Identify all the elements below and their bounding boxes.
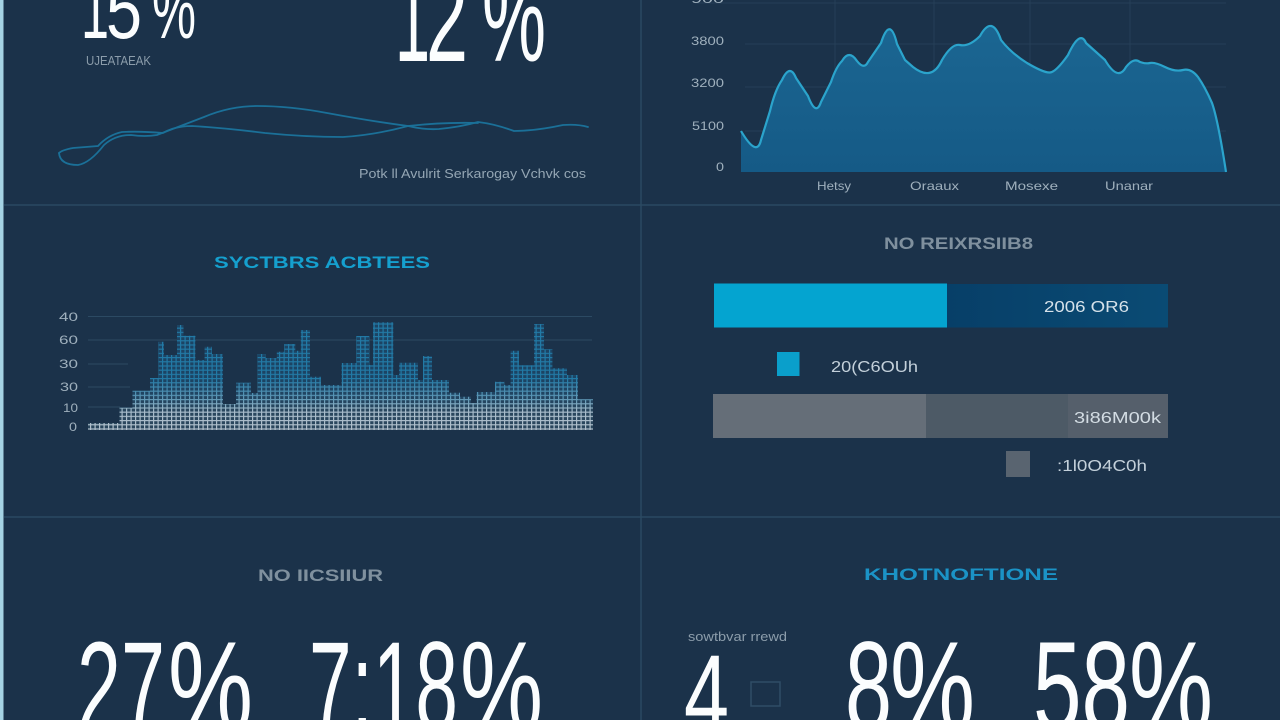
- bar: grey: 3i86M00k: [1074, 410, 1162, 427]
- panel: stacked bars: [713, 235, 1168, 477]
- area chart month labels: [817, 179, 1153, 193]
- line chart: two overlapping trends: [59, 106, 588, 165]
- area chart series: [741, 26, 1226, 172]
- area chart gridlines and axis: 0: [716, 160, 724, 174]
- dotted chart axis: [59, 310, 592, 434]
- area chart gridlines and axis: 3800: [691, 34, 724, 48]
- stat label: 15%: UJEATAEAK: [86, 54, 152, 68]
- legend: blue: [777, 352, 918, 376]
- area chart month labels: Mosexe: [1005, 179, 1058, 193]
- bar: grey: [713, 394, 1168, 438]
- stat: 8%: [845, 616, 975, 720]
- dotted chart axis: 60: [59, 333, 78, 347]
- panel: dotted bar chart: [59, 253, 594, 434]
- stat label: 4: sowtbvar rrewd: [688, 629, 787, 644]
- dotted chart axis: 10: [63, 401, 78, 415]
- dotted bars: [88, 320, 594, 432]
- area chart month labels: Unanar: [1105, 179, 1153, 193]
- panel: top left metrics: [59, 0, 588, 181]
- legend: grey: [1006, 451, 1147, 477]
- line chart caption: Potk ll Avulrit Serkarogay Vchvk cos: [359, 167, 586, 181]
- area chart gridlines and axis: [691, 0, 1226, 174]
- area chart gridlines and axis: 5100: [692, 119, 724, 133]
- dotted chart axis: 30: [60, 380, 78, 394]
- legend: grey: :1l0O4C0h: [1057, 458, 1147, 475]
- panel: bottom right metrics: [684, 566, 1213, 720]
- bar: blue: [714, 284, 1168, 328]
- dotted chart axis: 40: [59, 310, 78, 324]
- area chart month labels: Oraaux: [910, 179, 959, 193]
- panel: bottom left metrics: [77, 567, 543, 720]
- area chart month labels: Hetsy: [817, 179, 851, 193]
- area chart gridlines and axis: 3200: [691, 76, 724, 90]
- heading: bottom left: NO IICSIIUR: [258, 567, 383, 585]
- stat: 15%: [81, 0, 196, 56]
- heading: stacked bars: NO REIXRSIIB8: [884, 235, 1033, 253]
- stat: 12%: [395, 0, 546, 88]
- dotted chart axis: 0: [69, 420, 77, 434]
- legend: blue: 20(C6OUh: [831, 359, 918, 376]
- panel: area chart: [691, 0, 1226, 193]
- icon: outlined square: [751, 682, 780, 706]
- dotted chart axis: 30: [59, 357, 78, 371]
- heading: dotted bar chart: SYCTBRS ACBTEES: [214, 253, 430, 272]
- heading: bottom right: KHOTNOFTIONE: [864, 566, 1058, 584]
- area chart outline: [741, 26, 1226, 172]
- bar: blue: 2006 OR6: [1044, 299, 1129, 316]
